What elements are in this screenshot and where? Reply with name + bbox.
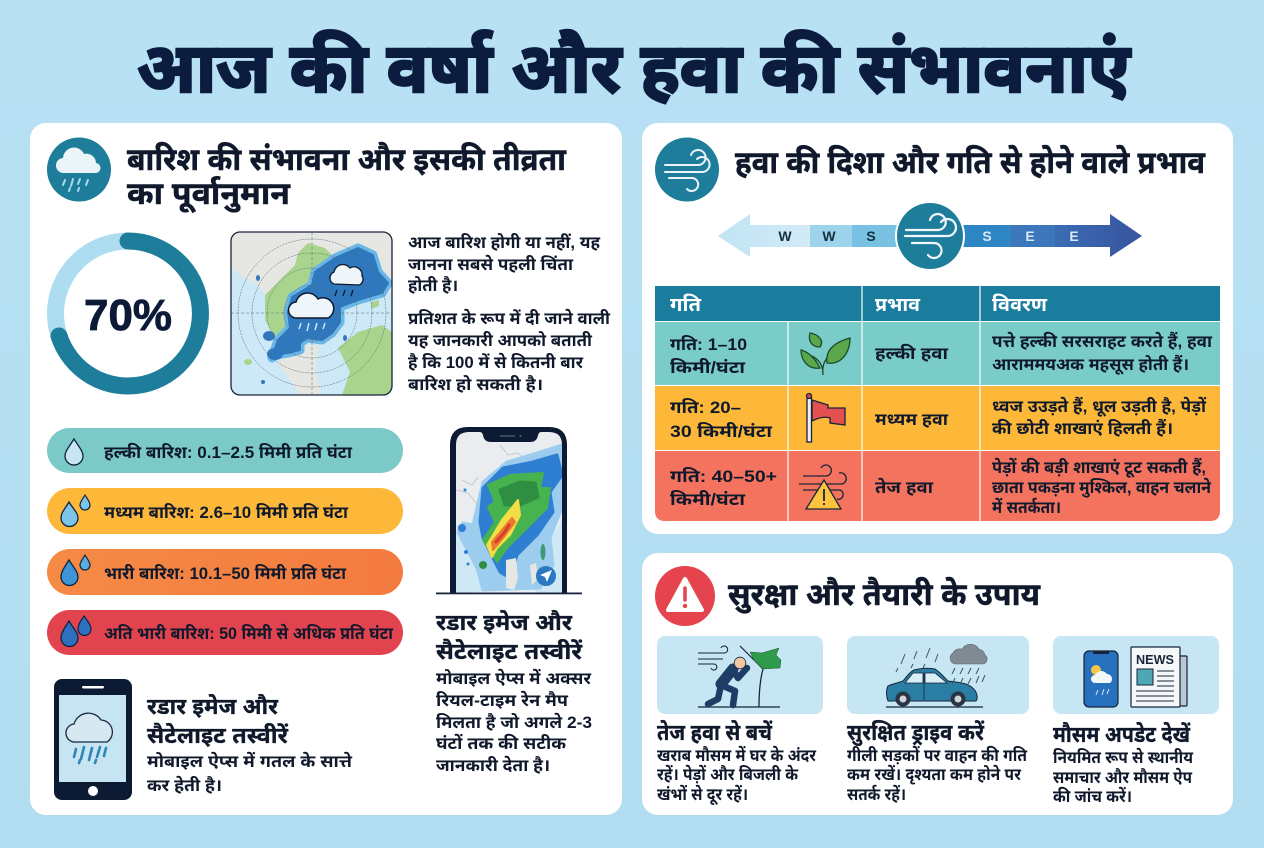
row: moderate wind: ध्वज उउड़ते हैं, धूल उड़ती है, पेड़ों (992, 395, 1207, 418)
wind direction arrow: E (1069, 228, 1079, 244)
table header (670, 294, 1048, 316)
pill: heavy rain: भारी बारिश: 10.1–50 मिमी प्रति घंटा (104, 563, 347, 583)
pill: moderate rain: मध्यम बारिश: 2.6–10 मिमी प्रति घंटा (104, 502, 349, 522)
table header: प्रभाव (875, 295, 921, 316)
icon: phone with rain cloud (54, 679, 132, 800)
rain map (231, 232, 392, 395)
text block: rain intro: प्रतिशत के रूप में दी जाने वाली (408, 309, 611, 328)
icon: leaves (801, 333, 850, 375)
card: weather updates: समाचार और मौसम ऐप (1053, 767, 1192, 787)
row: light wind: पत्ते हल्की सरसराहट करते हैं, हवा (992, 331, 1213, 351)
text block: rain intro: होती है। (408, 276, 458, 295)
text block: rain intro: आज बारिश होगी या नहीं, यह (408, 233, 601, 252)
icon: wind (655, 138, 719, 202)
text block: rain intro: जानना सबसे पहली चिंता (408, 255, 574, 274)
icon: person in wind (698, 646, 781, 707)
pill: light rain: हल्की बारिश: 0.1–2.5 मिमी प्रति घंटा (104, 442, 353, 462)
icon: car in rain (886, 644, 987, 707)
card: weather updates (1053, 636, 1219, 806)
heading: safety: सुरक्षा और तैयारी के उपाय (728, 577, 1041, 614)
chart: 70% rain probability donut (56, 241, 200, 386)
text block: rain intro: है कि 100 में से कितनी बार (408, 353, 584, 372)
card: avoid strong wind: खराब मौसम में घर के अंदर (657, 745, 816, 765)
row: strong wind: किमी/घंटा (670, 489, 746, 509)
heading: wind: हवा की दिशा और गति से होने वाले प्रभाव (735, 145, 1206, 180)
wind direction arrow: E (1025, 228, 1035, 244)
heading: rain forecast: का पूर्वानुमान (127, 176, 291, 213)
row: moderate wind (670, 394, 1207, 442)
text block: radar large: सैटेलाइट तस्वीरें (436, 638, 583, 664)
pill: heavy rain (47, 549, 403, 595)
row: moderate wind: 30 किमी/घंटा (670, 421, 773, 441)
row: strong wind: गति: 40–50+ (670, 466, 777, 486)
text block: radar large: जानकारी देता है। (436, 754, 550, 775)
card: drive safely: सतर्क रहें। (847, 784, 906, 804)
title: आज की वर्षा और हवा की संभावनाएं (137, 30, 1131, 107)
panel: wind effects (642, 123, 1233, 534)
chart: 70% rain probability donut: 70% (84, 291, 172, 340)
row: light wind: हल्की हवा (875, 343, 949, 363)
text block: radar large: रडार इमेज और (436, 610, 573, 635)
card: drive safely: कम रखें। दृश्यता कम होने पर (847, 764, 1021, 785)
card: weather updates: की जांच करें। (1053, 786, 1132, 806)
row: strong wind (670, 457, 1212, 517)
panel: safety (642, 553, 1233, 815)
card: drive safely: गीली सड़कों पर वाहन की गति (847, 745, 1027, 765)
text block: radar small: मोबाइल ऐप्स में गतल के सात्ते (147, 751, 353, 771)
text block: rain intro: यह जानकारी आपको बताती (408, 332, 593, 350)
wind direction arrow: S (982, 228, 992, 244)
table: wind speed effects (655, 286, 1220, 521)
row: moderate wind: मध्यम हवा (875, 410, 949, 429)
row: strong wind: छाता पकड़ना मुश्किल, वाहन चलाने (992, 477, 1212, 498)
wind direction arrow: S (866, 228, 876, 244)
row: strong wind: में सतर्कता। (992, 497, 1061, 517)
pill: very heavy rain (47, 610, 403, 655)
wind direction arrow: W (778, 228, 792, 244)
icon: phone and newspaper: NEWS (1136, 652, 1174, 667)
text block: rain intro (408, 233, 611, 394)
icon: phone and newspaper (1084, 647, 1187, 707)
wind direction arrow: W (822, 228, 836, 244)
row: light wind: आराममयअक महसूस होती हैं। (992, 354, 1189, 376)
pill: moderate rain (47, 488, 403, 534)
heading: rain forecast: बारिश की संभावना और इसकी तीव्रता (127, 142, 567, 177)
row: moderate wind: की छोटी शाखाएं हिलती हैं। (992, 418, 1173, 438)
wind direction arrow (718, 201, 1142, 271)
row: moderate wind: गति: 20– (670, 397, 741, 417)
row: strong wind: पेड़ों की बड़ी शाखाएं टूट सकती हैं, (992, 457, 1206, 479)
text block: radar large: रियल-टाइम रेन मैप (436, 689, 569, 710)
card: avoid strong wind: तेज हवा से बचें (657, 720, 773, 745)
row: strong wind: तेज हवा (875, 477, 934, 497)
text block: radar small: रडार इमेज और (147, 694, 279, 719)
icon: rain cloud (47, 138, 111, 202)
illustration: phone with radar map (436, 427, 582, 594)
card: avoid strong wind (657, 636, 823, 806)
row: light wind (670, 331, 1213, 377)
card: weather updates: मौसम अपडेट देखें (1053, 722, 1191, 747)
icon: wind warning (799, 465, 846, 509)
pill: light rain (47, 428, 403, 473)
table header: विवरण (992, 294, 1048, 316)
card: weather updates: नियमित रूप से स्थानीय (1053, 747, 1194, 767)
row: light wind: गति: 1–10 (670, 334, 747, 354)
heading: rain forecast (127, 142, 567, 213)
text block: radar large (436, 610, 592, 775)
table header: गति (670, 294, 702, 316)
icon: warning (655, 566, 715, 626)
icon: wind centre (895, 201, 965, 271)
card: drive safely (847, 636, 1029, 804)
panel: rain forecast (30, 123, 622, 815)
icon: flag (806, 394, 845, 442)
card: drive safely: सुरक्षित ड्राइव करें (847, 720, 985, 746)
text block: radar large: मिलता है जो अगले 2-3 (436, 711, 592, 732)
text block: radar large: घंटों तक की सटीक (436, 733, 567, 753)
card: avoid strong wind: खंभों से दूर रहें। (657, 784, 748, 806)
text block: radar small (147, 694, 353, 795)
text block: radar large: मोबाइल ऐप्स में अक्सर (436, 668, 592, 688)
pill: very heavy rain: अति भारी बारिश: 50 मिमी से अधिक प्रति घंटा (104, 623, 394, 643)
text block: radar small: सैटेलाइट तस्वीरें (147, 722, 289, 748)
text block: radar small: कर हेती है। (147, 774, 222, 795)
row: light wind: किमी/घंटा (670, 357, 746, 377)
card: avoid strong wind: रहें। पेड़ों और बिजली के (657, 764, 799, 784)
text block: rain intro: बारिश हो सकती है। (408, 375, 543, 394)
